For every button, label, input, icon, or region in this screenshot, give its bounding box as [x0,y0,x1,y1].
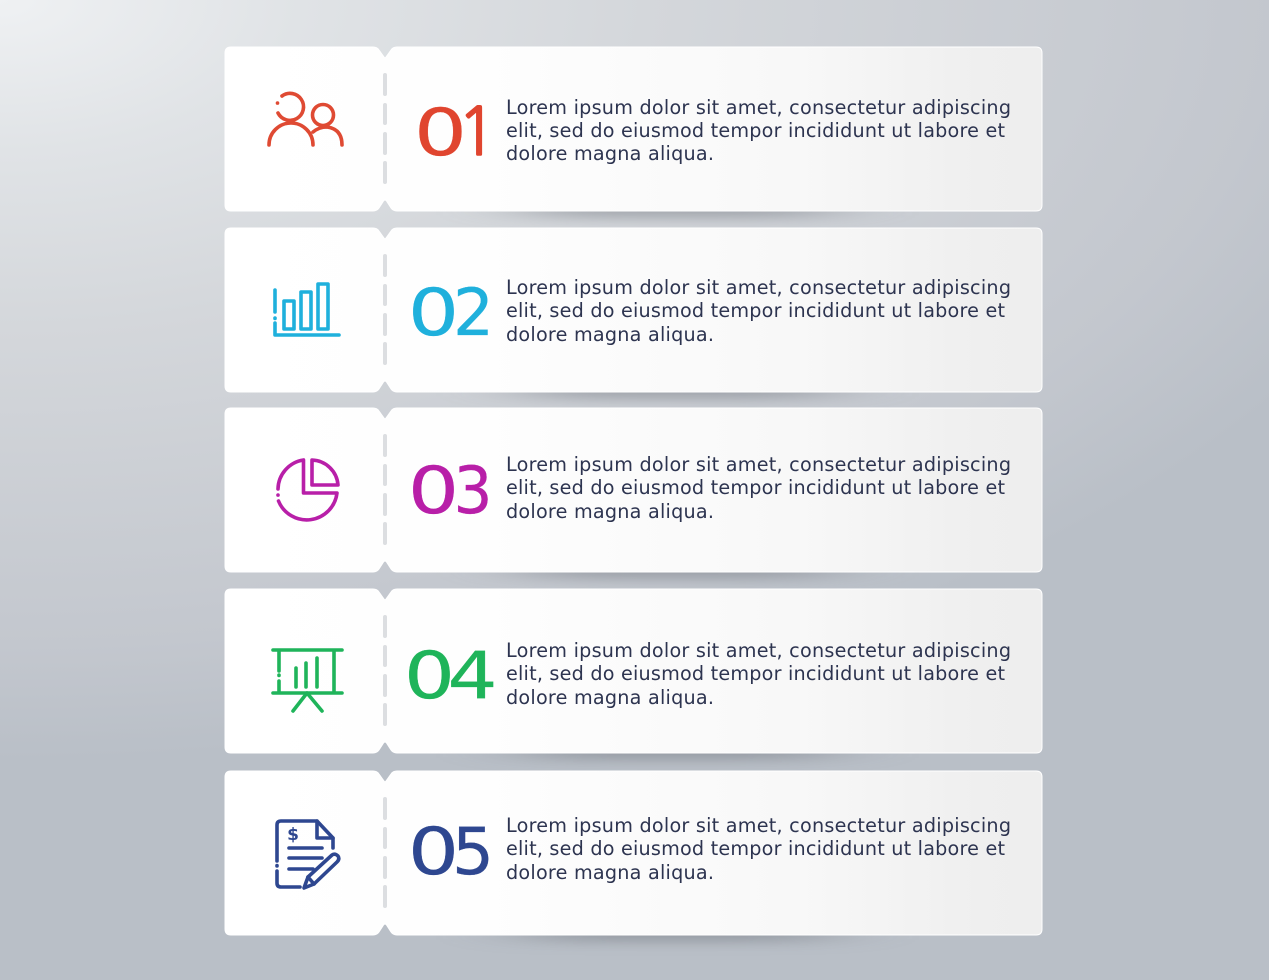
text block 4: elit, sed do eiusmod tempor incididunt ut labore et [506,662,1005,685]
number 05: 0 [408,815,459,890]
text block 1: dolore magna aliqua. [506,142,714,165]
card 2 [225,228,1042,392]
card 1 [225,47,1042,211]
text block 2: Lorem ipsum dolor sit amet, consectetur adipiscing [506,276,1011,299]
number 01 [414,96,497,171]
card shadow 5 [530,927,825,940]
number 05 [408,815,494,890]
number 04: 4 [448,639,498,714]
text block 1: elit, sed do eiusmod tempor incididunt ut labore et [506,119,1005,142]
card shadow 2 [530,384,825,397]
text block 4 [506,639,1011,709]
text block 3: dolore magna aliqua. [506,500,714,523]
number 02: 2 [453,276,494,351]
number 01: 0 [414,96,467,171]
card shadow 1 [530,203,825,216]
icon: bar chart [275,284,339,335]
text block 3 [506,453,1011,523]
text block 4: dolore magna aliqua. [506,686,714,709]
text block 5 [506,814,1011,884]
panel: step 1 [225,47,1042,216]
number 02: 0 [408,276,459,351]
text block 2 [506,276,1011,346]
text block 3: Lorem ipsum dolor sit amet, consectetur adipiscing [506,453,1011,476]
text block 3: elit, sed do eiusmod tempor incididunt ut labore et [506,476,1005,499]
panel: step 5 [225,771,1042,940]
number 03 [408,454,492,529]
panel: step 3 [225,408,1042,577]
card shadow 4 [530,745,825,758]
icon: pie chart [278,460,338,520]
number 03: 0 [408,454,459,529]
number 04 [404,639,498,714]
card 5 [225,771,1042,935]
text block 1 [506,96,1011,165]
text block 4: Lorem ipsum dolor sit amet, consectetur adipiscing [506,639,1011,662]
number 01: 1 [457,99,497,165]
card 4 [225,589,1042,753]
perforation 2 [383,256,387,363]
number 04: 0 [404,639,455,714]
text block 5: elit, sed do eiusmod tempor incididunt ut labore et [506,837,1005,860]
perforation 4 [383,617,387,724]
text block 2: dolore magna aliqua. [506,323,714,346]
number 02 [408,276,494,351]
panel: step 4 [225,589,1042,758]
number 05: 5 [452,815,494,890]
icon: presentation board [273,650,342,711]
perforation 3 [383,436,387,543]
card shadow 3 [530,564,825,577]
text block 1: Lorem ipsum dolor sit amet, consectetur adipiscing [506,96,1011,119]
icon: people [269,93,342,145]
number 03: 3 [454,454,492,529]
text block 2: elit, sed do eiusmod tempor incididunt ut labore et [506,299,1005,322]
icon: document and pencil [277,821,339,888]
perforation 1 [383,75,387,182]
perforation 5 [383,799,387,906]
dollar sign: $ [287,825,299,845]
panel: step 2 [225,228,1042,397]
card 3 [225,408,1042,572]
text block 5: dolore magna aliqua. [506,861,714,884]
text block 5: Lorem ipsum dolor sit amet, consectetur adipiscing [506,814,1011,837]
